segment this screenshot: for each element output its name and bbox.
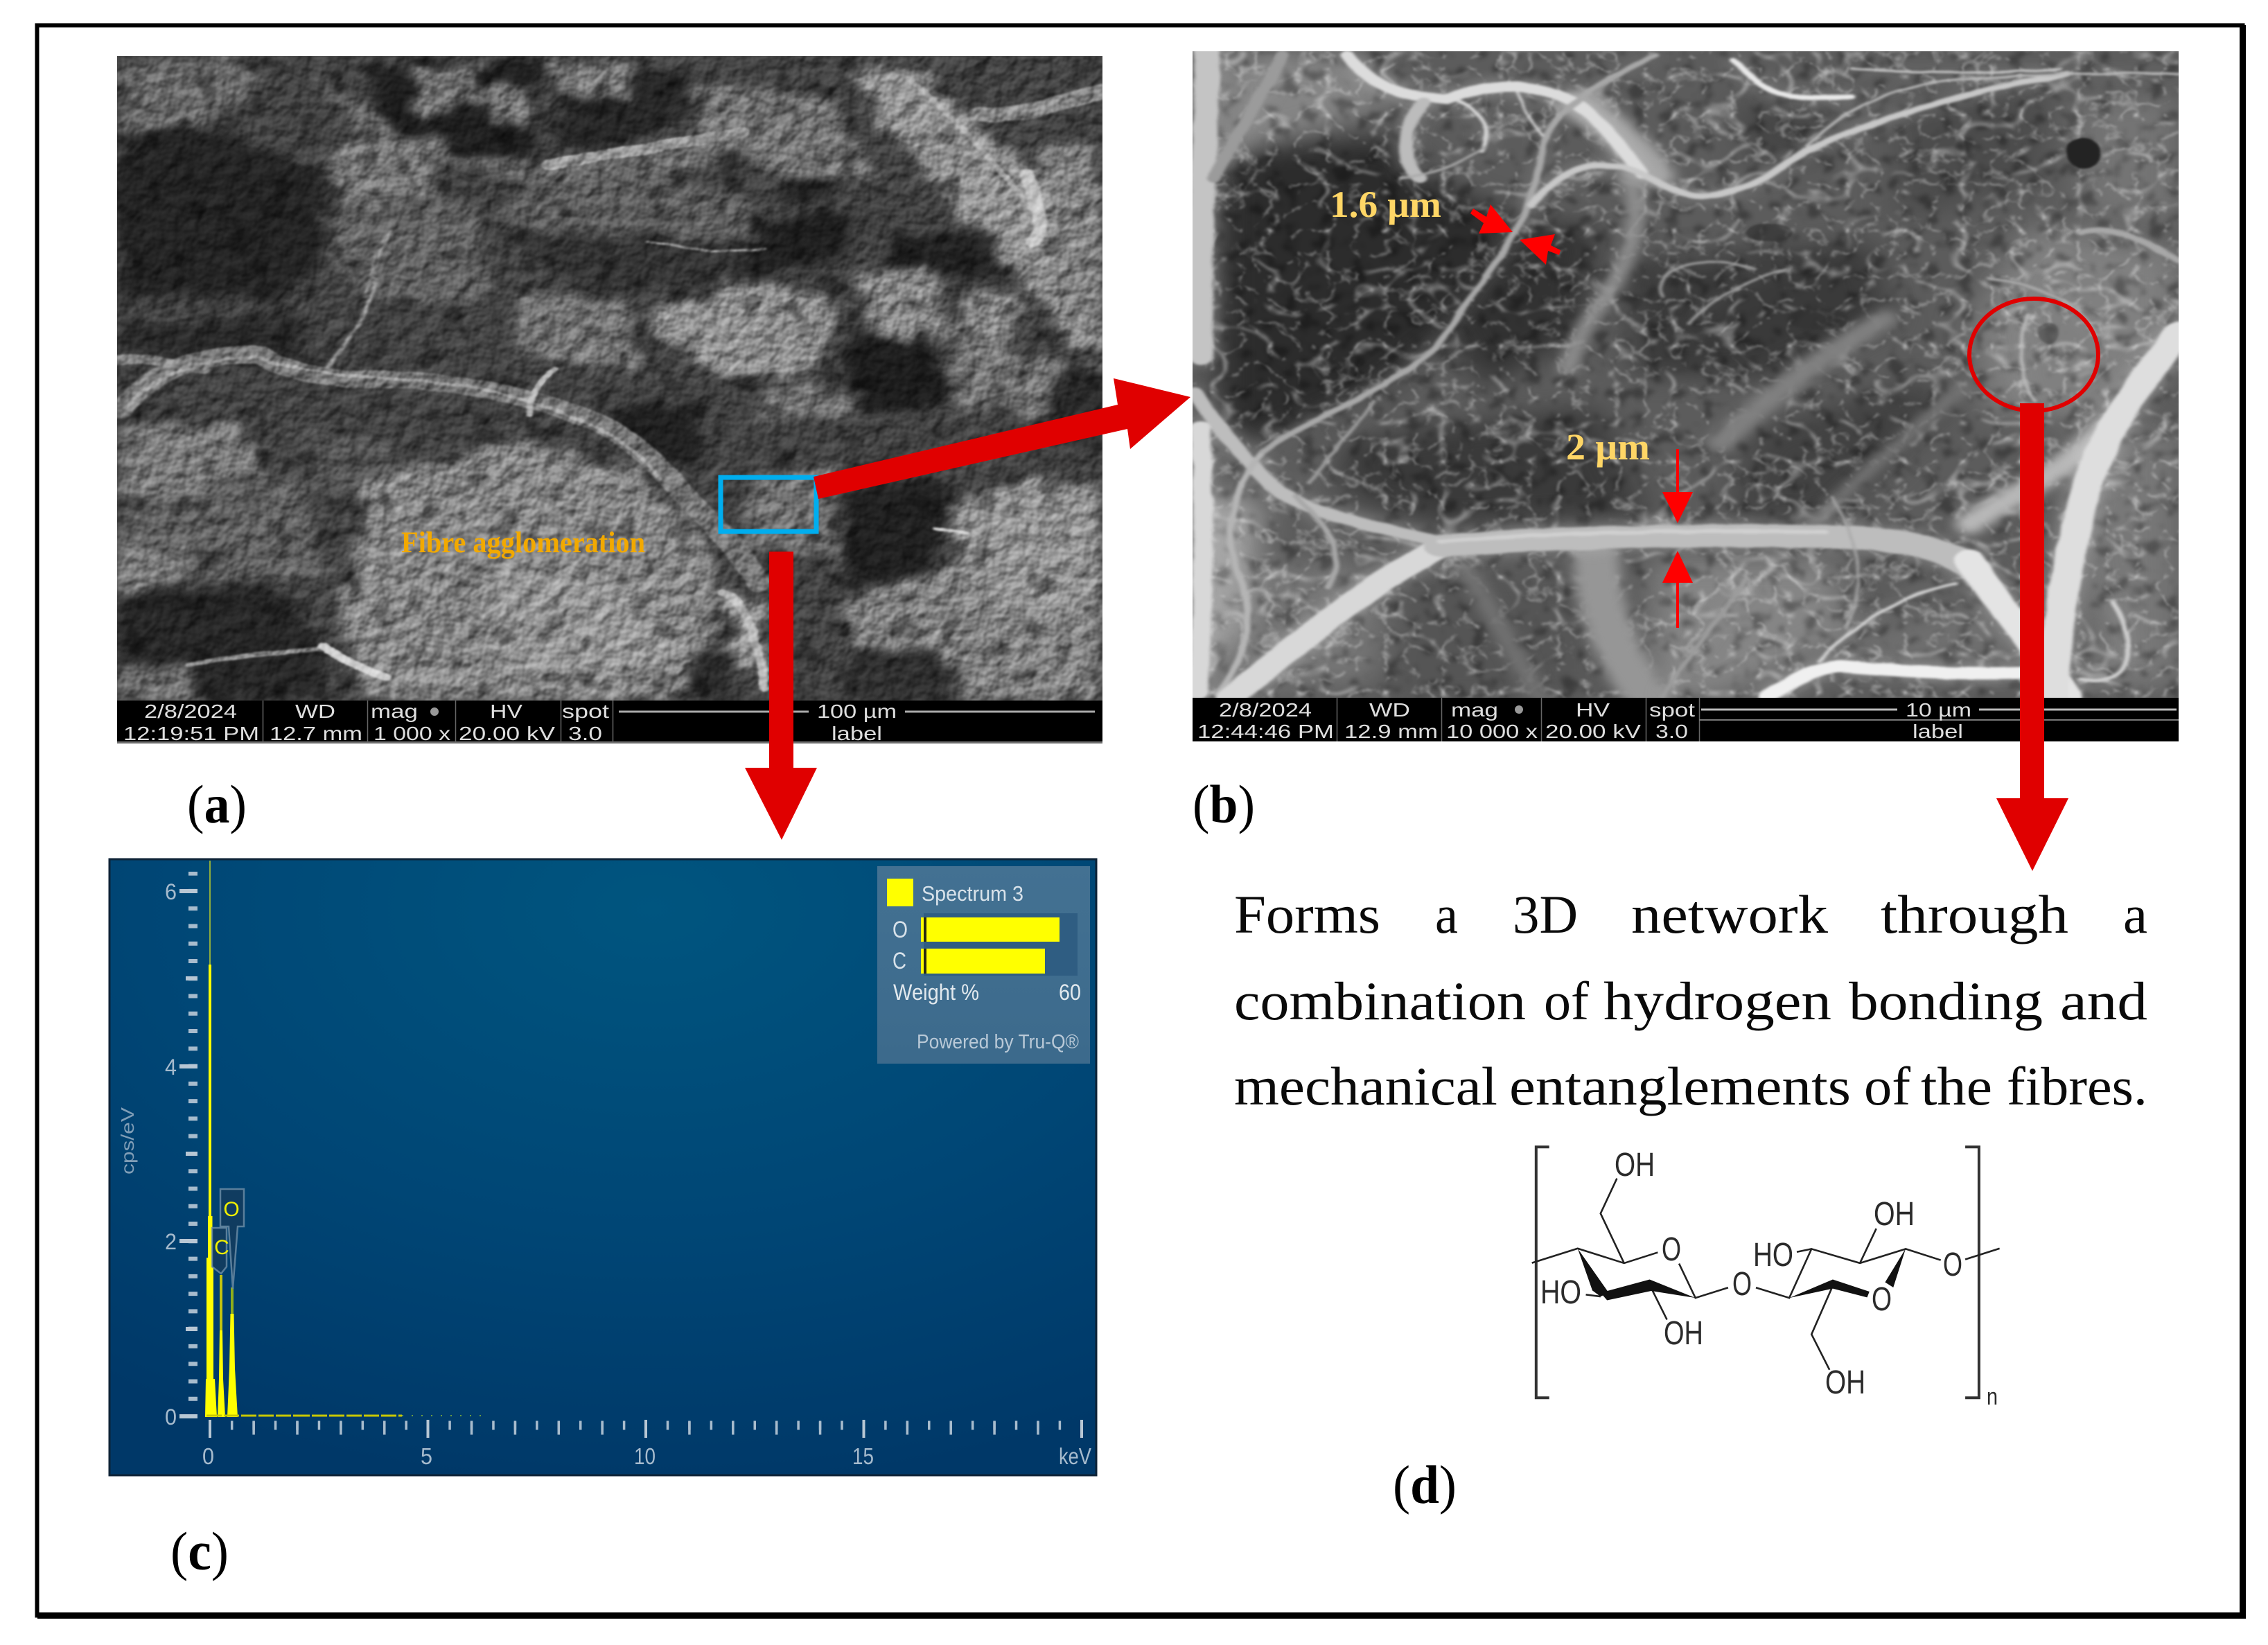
- x axis labels: 15: [852, 1443, 874, 1469]
- peak marker: C: [212, 1228, 229, 1274]
- legend colour swatch: [887, 879, 913, 906]
- description paragraph: mechanical: [1234, 1056, 1497, 1116]
- description paragraph: combination: [1234, 971, 1526, 1031]
- small red arrows for 1.6 µm: [1470, 204, 1561, 265]
- SEM a status bar: label: [832, 723, 882, 744]
- peak marker: C: C: [214, 1236, 229, 1259]
- y axis ticks: [179, 872, 197, 1418]
- label (a): (a): [187, 774, 247, 834]
- atom labels: OH: [1825, 1364, 1865, 1401]
- SEM a micrograph texture: [117, 56, 1102, 702]
- peak marker: O: [220, 1189, 244, 1289]
- SEM b status bar: 12.9 mm: [1344, 721, 1438, 742]
- description paragraph: a: [1435, 884, 1458, 944]
- cellulose chemical structure: [1532, 1147, 2000, 1410]
- label (c): (c): [170, 1521, 229, 1581]
- small red arrows for 2 µm: [1662, 449, 1693, 628]
- y axis title: cps/eV: [117, 1107, 138, 1175]
- x axis labels: 5: [421, 1443, 432, 1469]
- description paragraph: the: [1921, 1056, 1992, 1116]
- description paragraph: hydrogen: [1603, 971, 1831, 1031]
- panel a: low-magnification SEM image: [117, 56, 1102, 744]
- y axis labels: 2: [165, 1229, 177, 1254]
- annotation: fibre agglomeration: Fibre agglomeration: [401, 527, 645, 559]
- SEM a status bar: WD: [295, 701, 335, 722]
- description paragraph: network: [1631, 884, 1828, 944]
- x axis labels: 10: [634, 1443, 656, 1469]
- description paragraph: through: [1881, 884, 2068, 944]
- annotation: 1.6 µm width: 1.6 µm: [1330, 184, 1441, 225]
- SEM b status bar: mag: [1451, 699, 1498, 721]
- SEM b status bar: label: [1913, 721, 1963, 742]
- SEM a status bar: 2/8/2024: [144, 701, 237, 722]
- atom labels: [1540, 1147, 1998, 1410]
- SEM b status bar: HV: [1576, 699, 1610, 721]
- red ellipse highlighting network: [1969, 299, 2098, 411]
- SEM a status bar: 3.0: [568, 723, 602, 744]
- SEM a status bar: 100 µm: [817, 701, 897, 722]
- legend title: Spectrum 3: [922, 881, 1023, 906]
- broad soft fibre bundles in panel b: [1466, 103, 2107, 697]
- SEM b status bar: 3.0: [1655, 721, 1688, 742]
- dark pores in panel b: [1746, 138, 2101, 344]
- legend element bars: [893, 913, 1078, 976]
- peak marker: O: O: [223, 1198, 240, 1221]
- y axis labels: [165, 879, 177, 1430]
- y axis labels: 4: [165, 1055, 177, 1080]
- x axis labels: keV: [1059, 1443, 1091, 1469]
- SEM a status bar: [117, 701, 1102, 744]
- SEM a status bar: 20.00 kV: [459, 723, 555, 744]
- SEM b status bar: 20.00 kV: [1545, 721, 1641, 742]
- atom labels: O: [1732, 1266, 1752, 1303]
- atom labels: OH: [1874, 1196, 1915, 1233]
- SEM b status bar: 2/8/2024: [1219, 699, 1312, 721]
- atom labels: n: [1987, 1384, 1998, 1410]
- atom labels: HO: [1540, 1274, 1581, 1311]
- arrow: from ellipse down to description: [1996, 403, 2068, 871]
- blue selection box: [721, 477, 816, 531]
- atom labels: OH: [1615, 1147, 1655, 1184]
- description paragraph: of: [1544, 971, 1589, 1031]
- description paragraph: Forms: [1234, 884, 1380, 944]
- legend element bars: O: [893, 917, 908, 943]
- SEM b status bar: WD: [1369, 699, 1410, 721]
- fibre strands in panel b: [1195, 51, 2179, 697]
- SEM b status bar: 10 000 x: [1446, 721, 1538, 742]
- legend weight axis: Weight %: [893, 980, 979, 1005]
- label (b): (b): [1193, 774, 1255, 834]
- description paragraph: a: [2123, 884, 2147, 944]
- atom labels: O: [1662, 1231, 1681, 1268]
- SEM a status bar: 12.7 mm: [270, 723, 362, 744]
- x axis labels: 0: [202, 1443, 214, 1469]
- legend element bars: C: [893, 948, 906, 974]
- SEM a status bar: 1 000 x: [373, 723, 450, 744]
- legend weight value: 60: [1059, 980, 1081, 1005]
- description paragraph: of: [1864, 1056, 1910, 1116]
- description paragraph: [1234, 884, 2147, 1116]
- SEM b micrograph texture: [1193, 51, 2179, 698]
- arrow: from box down to EDS spectrum: [745, 552, 817, 840]
- SEM b status bar: 10 µm: [1906, 699, 1971, 721]
- y axis labels: 6: [165, 879, 177, 904]
- x axis labels: [202, 1443, 1091, 1469]
- description paragraph: 3D: [1513, 884, 1578, 944]
- SEM b status bar: spot: [1649, 699, 1695, 721]
- panel c: EDS spectrum chart: [109, 859, 1096, 1475]
- annotation: 2 µm width: 2 µm: [1566, 426, 1650, 468]
- legend credit: Powered by Tru-Q®: [917, 1031, 1079, 1053]
- spectrum peaks: [205, 861, 485, 1417]
- description paragraph: and: [2060, 971, 2147, 1031]
- atom labels: O: [1872, 1281, 1892, 1318]
- panel b: high-magnification SEM image: [1193, 51, 2179, 742]
- SEM b status bar: [1193, 698, 2179, 742]
- x axis ticks: [209, 1420, 1084, 1438]
- chart background: [109, 859, 1096, 1475]
- atom labels: O: [1943, 1247, 1962, 1283]
- arrow: from box to panel b: [814, 378, 1190, 499]
- description paragraph: entanglements: [1509, 1056, 1851, 1116]
- label (d): (d): [1393, 1454, 1457, 1515]
- SEM a status bar: spot: [562, 701, 609, 722]
- description paragraph: bonding: [1849, 971, 2043, 1031]
- atom labels: OH: [1664, 1315, 1703, 1352]
- bonds and rings: [1532, 1179, 2000, 1370]
- repeat-unit brackets: [1536, 1147, 1979, 1398]
- legend box: [877, 866, 1090, 1064]
- y axis labels: 0: [165, 1405, 177, 1430]
- SEM a status bar: HV: [490, 701, 522, 722]
- SEM a status bar: 12:19:51 PM: [123, 723, 259, 744]
- atom labels: HO: [1753, 1237, 1793, 1274]
- SEM a status bar: mag: [371, 701, 418, 722]
- fibre strand across panel a: [117, 78, 1102, 688]
- SEM b status bar: 12:44:46 PM: [1197, 721, 1334, 742]
- description paragraph: fibres.: [2007, 1056, 2147, 1116]
